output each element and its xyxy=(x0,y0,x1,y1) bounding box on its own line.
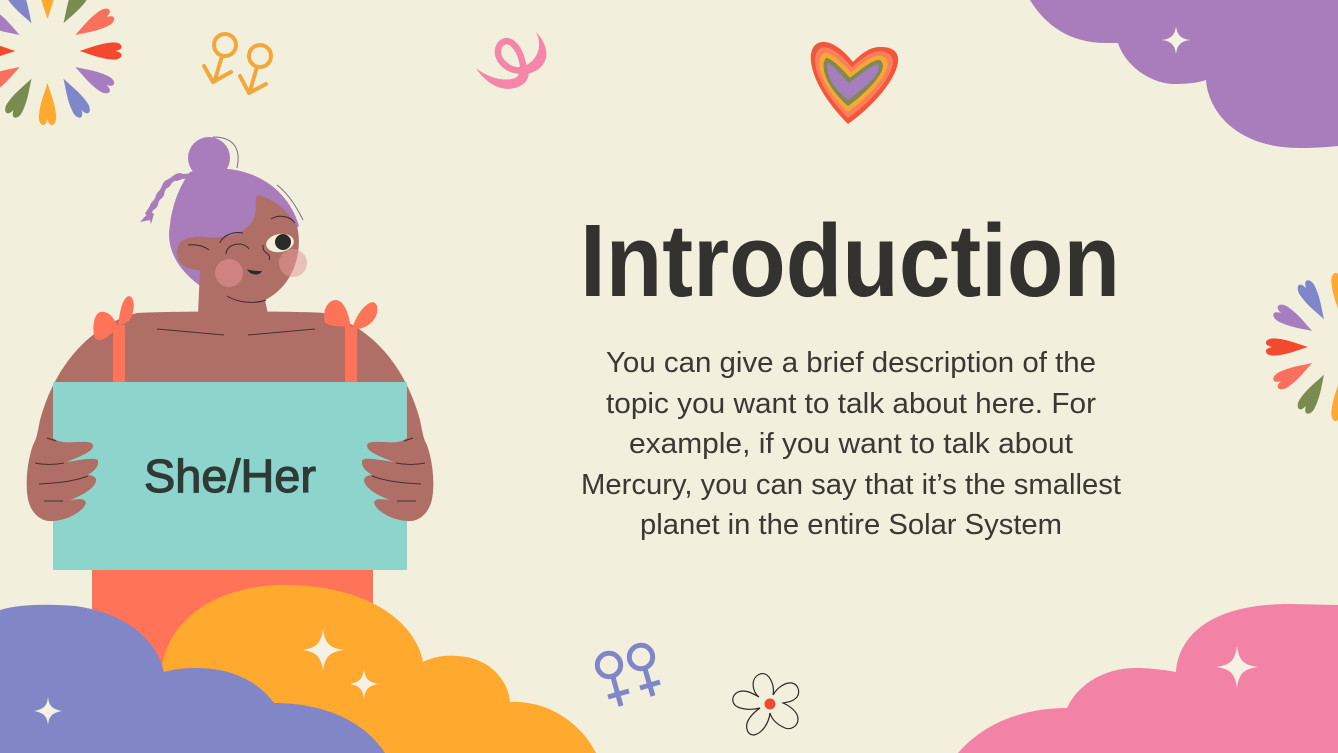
body and shoulders xyxy=(34,312,426,450)
cloud: orange bottom xyxy=(162,585,596,753)
cloud: pink bottom right xyxy=(958,604,1338,753)
collar lines xyxy=(157,329,315,335)
icon: periwinkle female symbols xyxy=(597,645,660,706)
icon: orange male symbols xyxy=(204,34,271,93)
icon: pink ribbon xyxy=(476,32,546,89)
dress xyxy=(92,565,373,675)
hair and braid xyxy=(140,137,303,292)
icon: rainbow heart xyxy=(811,42,898,124)
firework: right edge xyxy=(1266,273,1338,421)
right strap and bow xyxy=(324,300,377,383)
body text: planet in the entire Solar System xyxy=(640,509,1062,541)
body text: Mercury, you can say that it’s the smallest xyxy=(581,469,1121,501)
body text: topic you want to talk about here. For xyxy=(606,388,1096,420)
character: woman holding sign xyxy=(27,137,433,675)
left hand xyxy=(27,400,98,521)
sign label: She/Her xyxy=(144,450,316,502)
title: Introduction xyxy=(580,203,1120,318)
body text: You can give a brief description of the xyxy=(606,347,1096,379)
icon: flower xyxy=(733,674,799,735)
firework: top left xyxy=(0,0,122,125)
cloud: periwinkle bottom left xyxy=(0,605,385,753)
face and neck xyxy=(177,195,299,314)
body text: example, if you want to talk about xyxy=(629,428,1073,460)
sign board xyxy=(53,382,407,570)
left strap and bow xyxy=(93,296,134,383)
face details xyxy=(188,216,307,302)
cloud: purple top right xyxy=(1030,0,1338,148)
right hand xyxy=(362,400,433,521)
